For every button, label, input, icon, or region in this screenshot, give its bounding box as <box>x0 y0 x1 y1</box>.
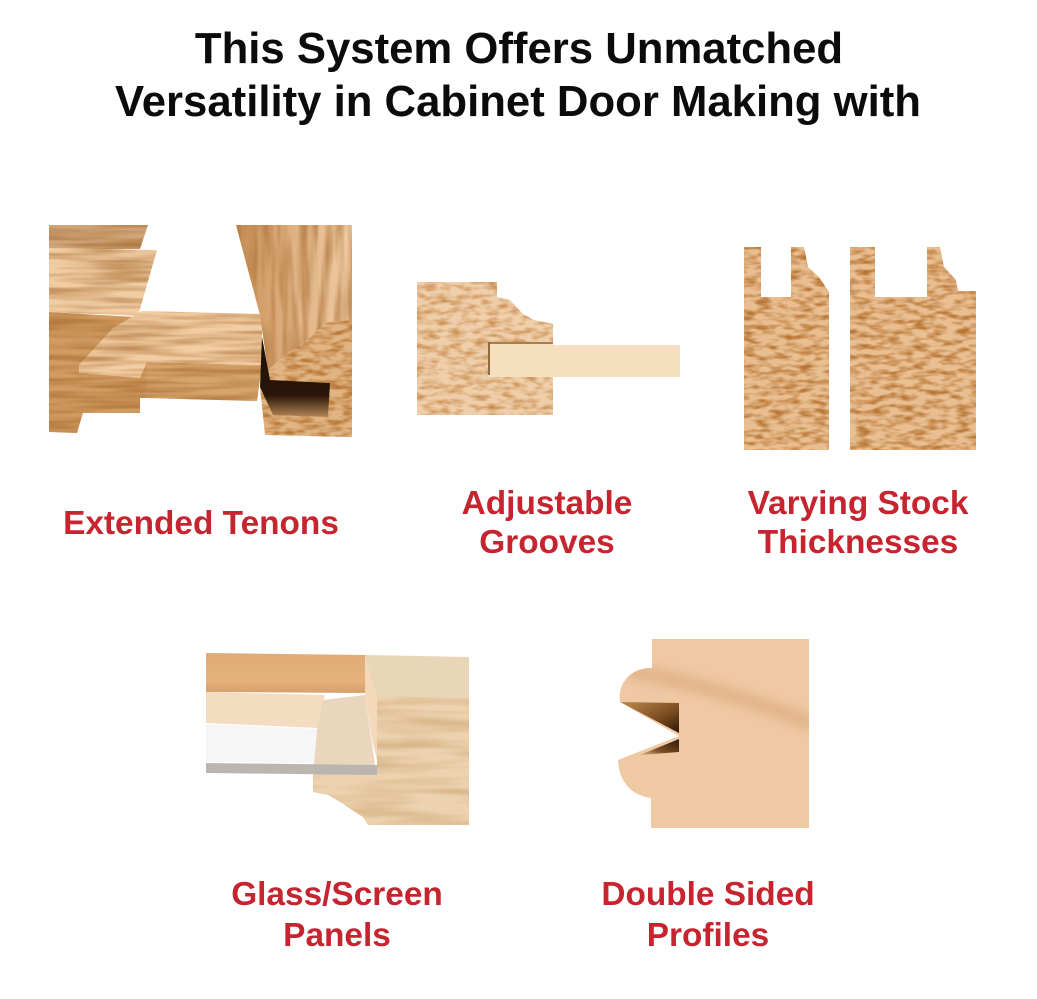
title <box>115 24 921 126</box>
panel: adjustable grooves image <box>417 282 680 415</box>
title: This System Offers Unmatched <box>195 24 843 73</box>
label: glass/screen panels: Panels <box>283 917 391 954</box>
label: double sided profiles <box>601 876 815 954</box>
label: varying stock thicknesses: Varying Stock <box>748 485 969 522</box>
label: extended tenons: Extended Tenons <box>63 505 339 542</box>
label: adjustable grooves: Adjustable <box>462 485 632 522</box>
panel: extended tenons image <box>49 225 352 437</box>
panel: varying stock thicknesses image <box>744 247 976 450</box>
label: glass/screen panels <box>231 876 443 954</box>
panel: double sided profiles image <box>618 639 815 828</box>
title: Versatility in Cabinet Door Making with <box>115 77 921 126</box>
label: double sided profiles: Profiles <box>647 917 769 954</box>
label: varying stock thicknesses <box>748 485 969 561</box>
panel: glass and screen panels image <box>206 653 469 825</box>
label: varying stock thicknesses: Thicknesses <box>758 524 958 561</box>
label: glass/screen panels: Glass/Screen <box>231 876 443 913</box>
label: double sided profiles: Double Sided <box>601 876 815 913</box>
label: adjustable grooves <box>462 485 632 561</box>
label: adjustable grooves: Grooves <box>479 524 615 561</box>
